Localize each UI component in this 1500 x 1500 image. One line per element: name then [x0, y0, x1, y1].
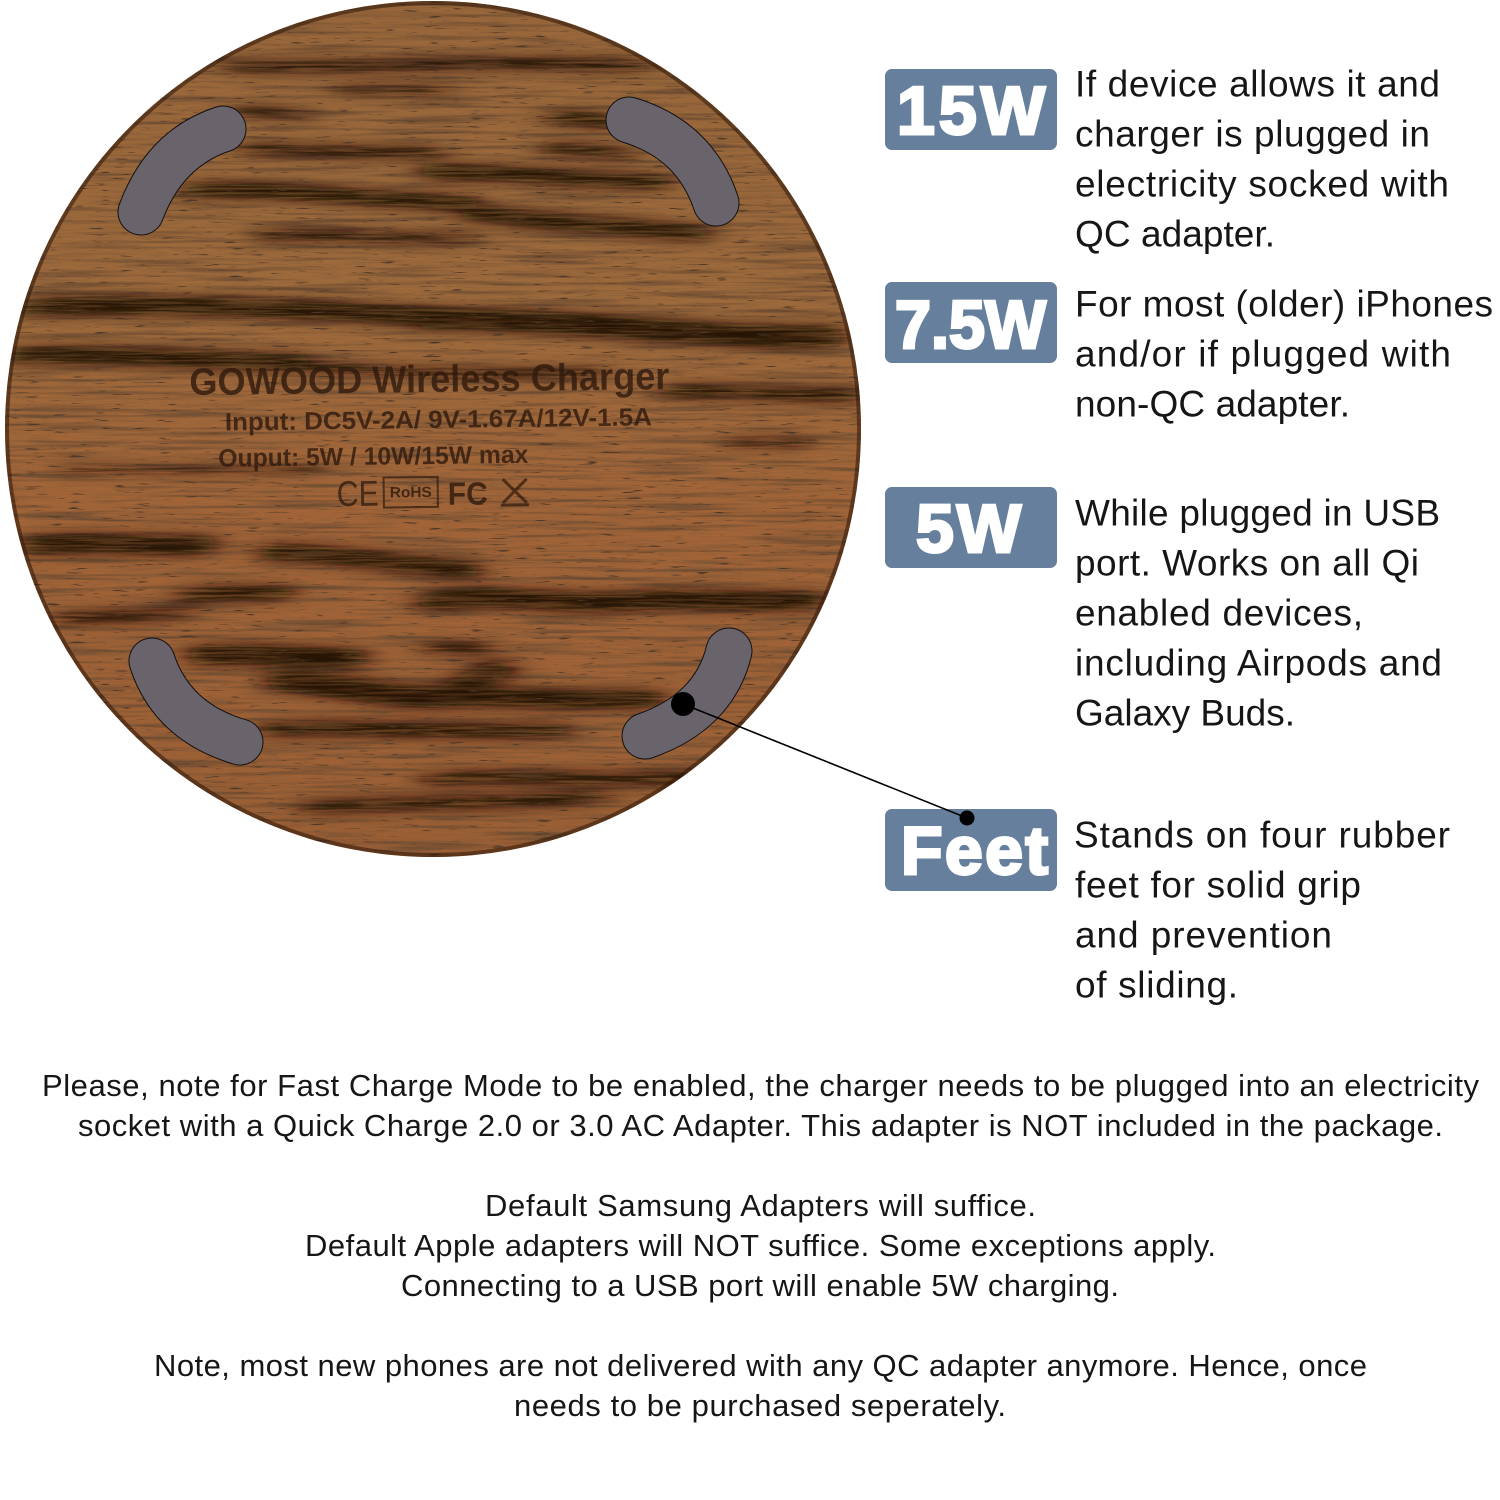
text: 5W description: Galaxy Buds. — [1075, 692, 1295, 734]
foot: top right — [629, 120, 716, 203]
note: adapter compatibility: Default Apple adapters will NOT suffice. Some exceptions apply. — [305, 1228, 1216, 1263]
disc base — [5, 1, 861, 857]
note: QC adapter purchase: Note, most new phones are not delivered with any QC adapter anymore. Hence, once — [154, 1348, 1367, 1383]
note: adapter compatibility: Default Samsung Adapters will suffice. — [485, 1188, 1036, 1223]
badge: 5W: 5W — [916, 491, 1022, 567]
engraved certification marks: CE — [337, 473, 379, 514]
text: Feet description: and prevention — [1075, 914, 1332, 956]
text: Feet description: Stands on four rubber — [1074, 814, 1450, 856]
text: 7.5W description — [1075, 284, 1493, 424]
text: 5W description: port. Works on all Qi — [1075, 542, 1419, 584]
text: Feet description: feet for solid grip — [1075, 864, 1361, 906]
engraved certification marks: RoHS — [390, 484, 432, 501]
text: 5W description: including Airpods and — [1075, 642, 1442, 684]
badge: 7.5W: 7.5W — [895, 287, 1047, 363]
text: 5W description — [1075, 492, 1442, 734]
note: adapter compatibility — [305, 1188, 1216, 1303]
note: QC adapter purchase — [154, 1348, 1367, 1423]
text: Feet description — [1074, 814, 1450, 1006]
foot: bottom right — [645, 651, 729, 736]
engraved output rating: Ouput: 5W / 10W/15W max — [218, 441, 529, 473]
callout line from foot to Feet badge — [671, 692, 974, 826]
disc edge shading — [7, 3, 859, 855]
note: fast charge requirement — [42, 1068, 1480, 1143]
text: 5W description: enabled devices, — [1075, 592, 1363, 634]
text: Feet description: of sliding. — [1075, 964, 1238, 1006]
badge: Feet: Feet — [901, 813, 1048, 889]
badge: 5W — [885, 487, 1057, 568]
text: 5W description: While plugged in USB — [1075, 492, 1440, 534]
note: fast charge requirement: Please, note for Fast Charge Mode to be enabled, the charger needs to be plugged into an electricity — [42, 1068, 1480, 1103]
note: adapter compatibility: Connecting to a USB port will enable 5W charging. — [401, 1268, 1119, 1303]
text: 15W description — [1075, 64, 1449, 254]
engraved label — [189, 356, 671, 516]
engraved certification marks: FC — [448, 475, 488, 512]
text: 7.5W description: non-QC adapter. — [1075, 384, 1350, 424]
text: 7.5W description: For most (older) iPhones — [1075, 284, 1493, 324]
engraved input rating: Input: DC5V-2A/ 9V-1.67A/12V-1.5A — [225, 403, 652, 437]
badge: 15W: 15W — [897, 73, 1046, 149]
foot: bottom left — [152, 661, 240, 742]
text: 7.5W description: and/or if plugged with — [1075, 334, 1451, 374]
engraved certification marks — [337, 471, 529, 514]
note: QC adapter purchase: needs to be purchased seperately. — [514, 1388, 1006, 1423]
text: 15W description: charger is plugged in — [1075, 114, 1430, 154]
rubber feet — [141, 120, 729, 742]
engraved title: GOWOOD Wireless Charger — [189, 356, 670, 404]
wooden charger disc — [0, 0, 870, 860]
foot: top left — [141, 129, 223, 212]
text: 15W description: If device allows it and — [1075, 64, 1440, 104]
text: 15W description: QC adapter. — [1075, 214, 1275, 254]
note: fast charge requirement: socket with a Quick Charge 2.0 or 3.0 AC Adapter. This adapter is NOT included in the package. — [78, 1108, 1443, 1143]
text: 15W description: electricity socked with — [1075, 164, 1449, 204]
dark grain bands — [20, 63, 855, 808]
